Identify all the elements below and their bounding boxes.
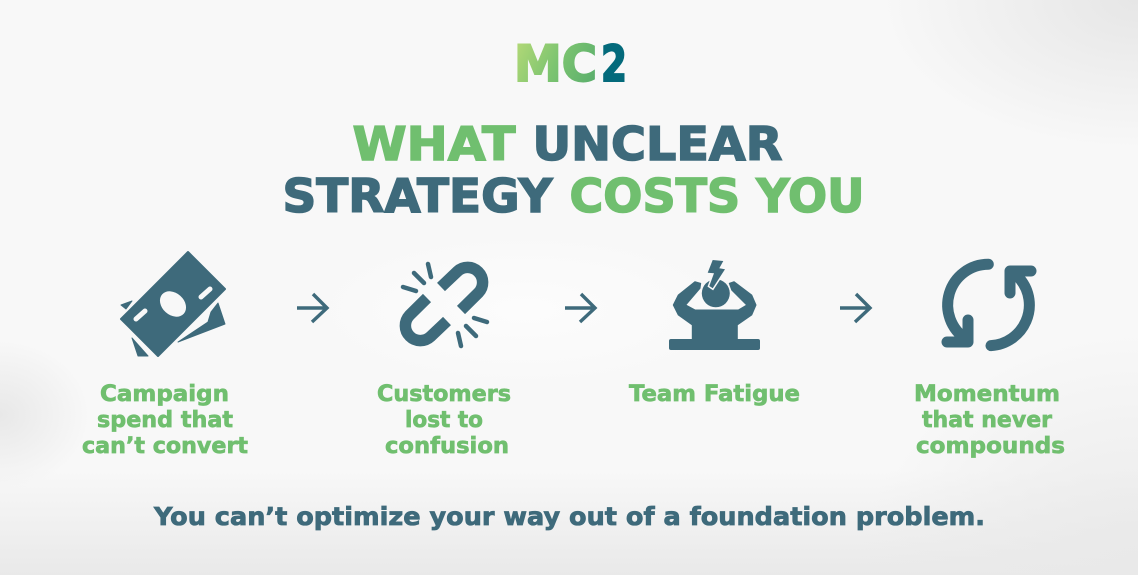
- icon: stressed person at desk: [669, 260, 760, 350]
- label: campaign spend: [82, 382, 248, 459]
- label: customers lost: [377, 382, 511, 459]
- closing statement: You can’t optimize your way out of a foundation problem.: [153, 502, 985, 531]
- arrow 3: [840, 294, 870, 322]
- icon: cycle arrows: [947, 264, 1031, 346]
- logo: MC2: 2: [601, 35, 627, 93]
- logo: MC2: MC: [514, 35, 597, 93]
- label: momentum: that never: [922, 408, 1052, 433]
- title: WHAT: [352, 117, 516, 171]
- label: momentum: [914, 382, 1065, 459]
- label: customers lost: confusion: [385, 434, 509, 459]
- arrow 2: [565, 294, 595, 322]
- label: customers lost: Customers: [377, 382, 511, 407]
- label: momentum: compounds: [916, 434, 1065, 459]
- label: campaign spend: Campaign: [100, 382, 229, 407]
- label: campaign spend: can’t convert: [82, 434, 248, 459]
- title: UNCLEAR: [532, 117, 782, 171]
- icon: money bills: [121, 252, 225, 356]
- label: momentum: Momentum: [914, 382, 1060, 407]
- title: COSTS YOU: [570, 169, 864, 223]
- arrow 1: [297, 294, 327, 322]
- label: team fatigue: Team Fatigue: [629, 382, 800, 407]
- label: customers lost: lost to: [405, 408, 483, 433]
- icon: broken chain link: [403, 264, 487, 346]
- title: STRATEGY: [282, 169, 554, 223]
- title: [282, 117, 864, 223]
- label: campaign spend: spend that: [97, 408, 233, 433]
